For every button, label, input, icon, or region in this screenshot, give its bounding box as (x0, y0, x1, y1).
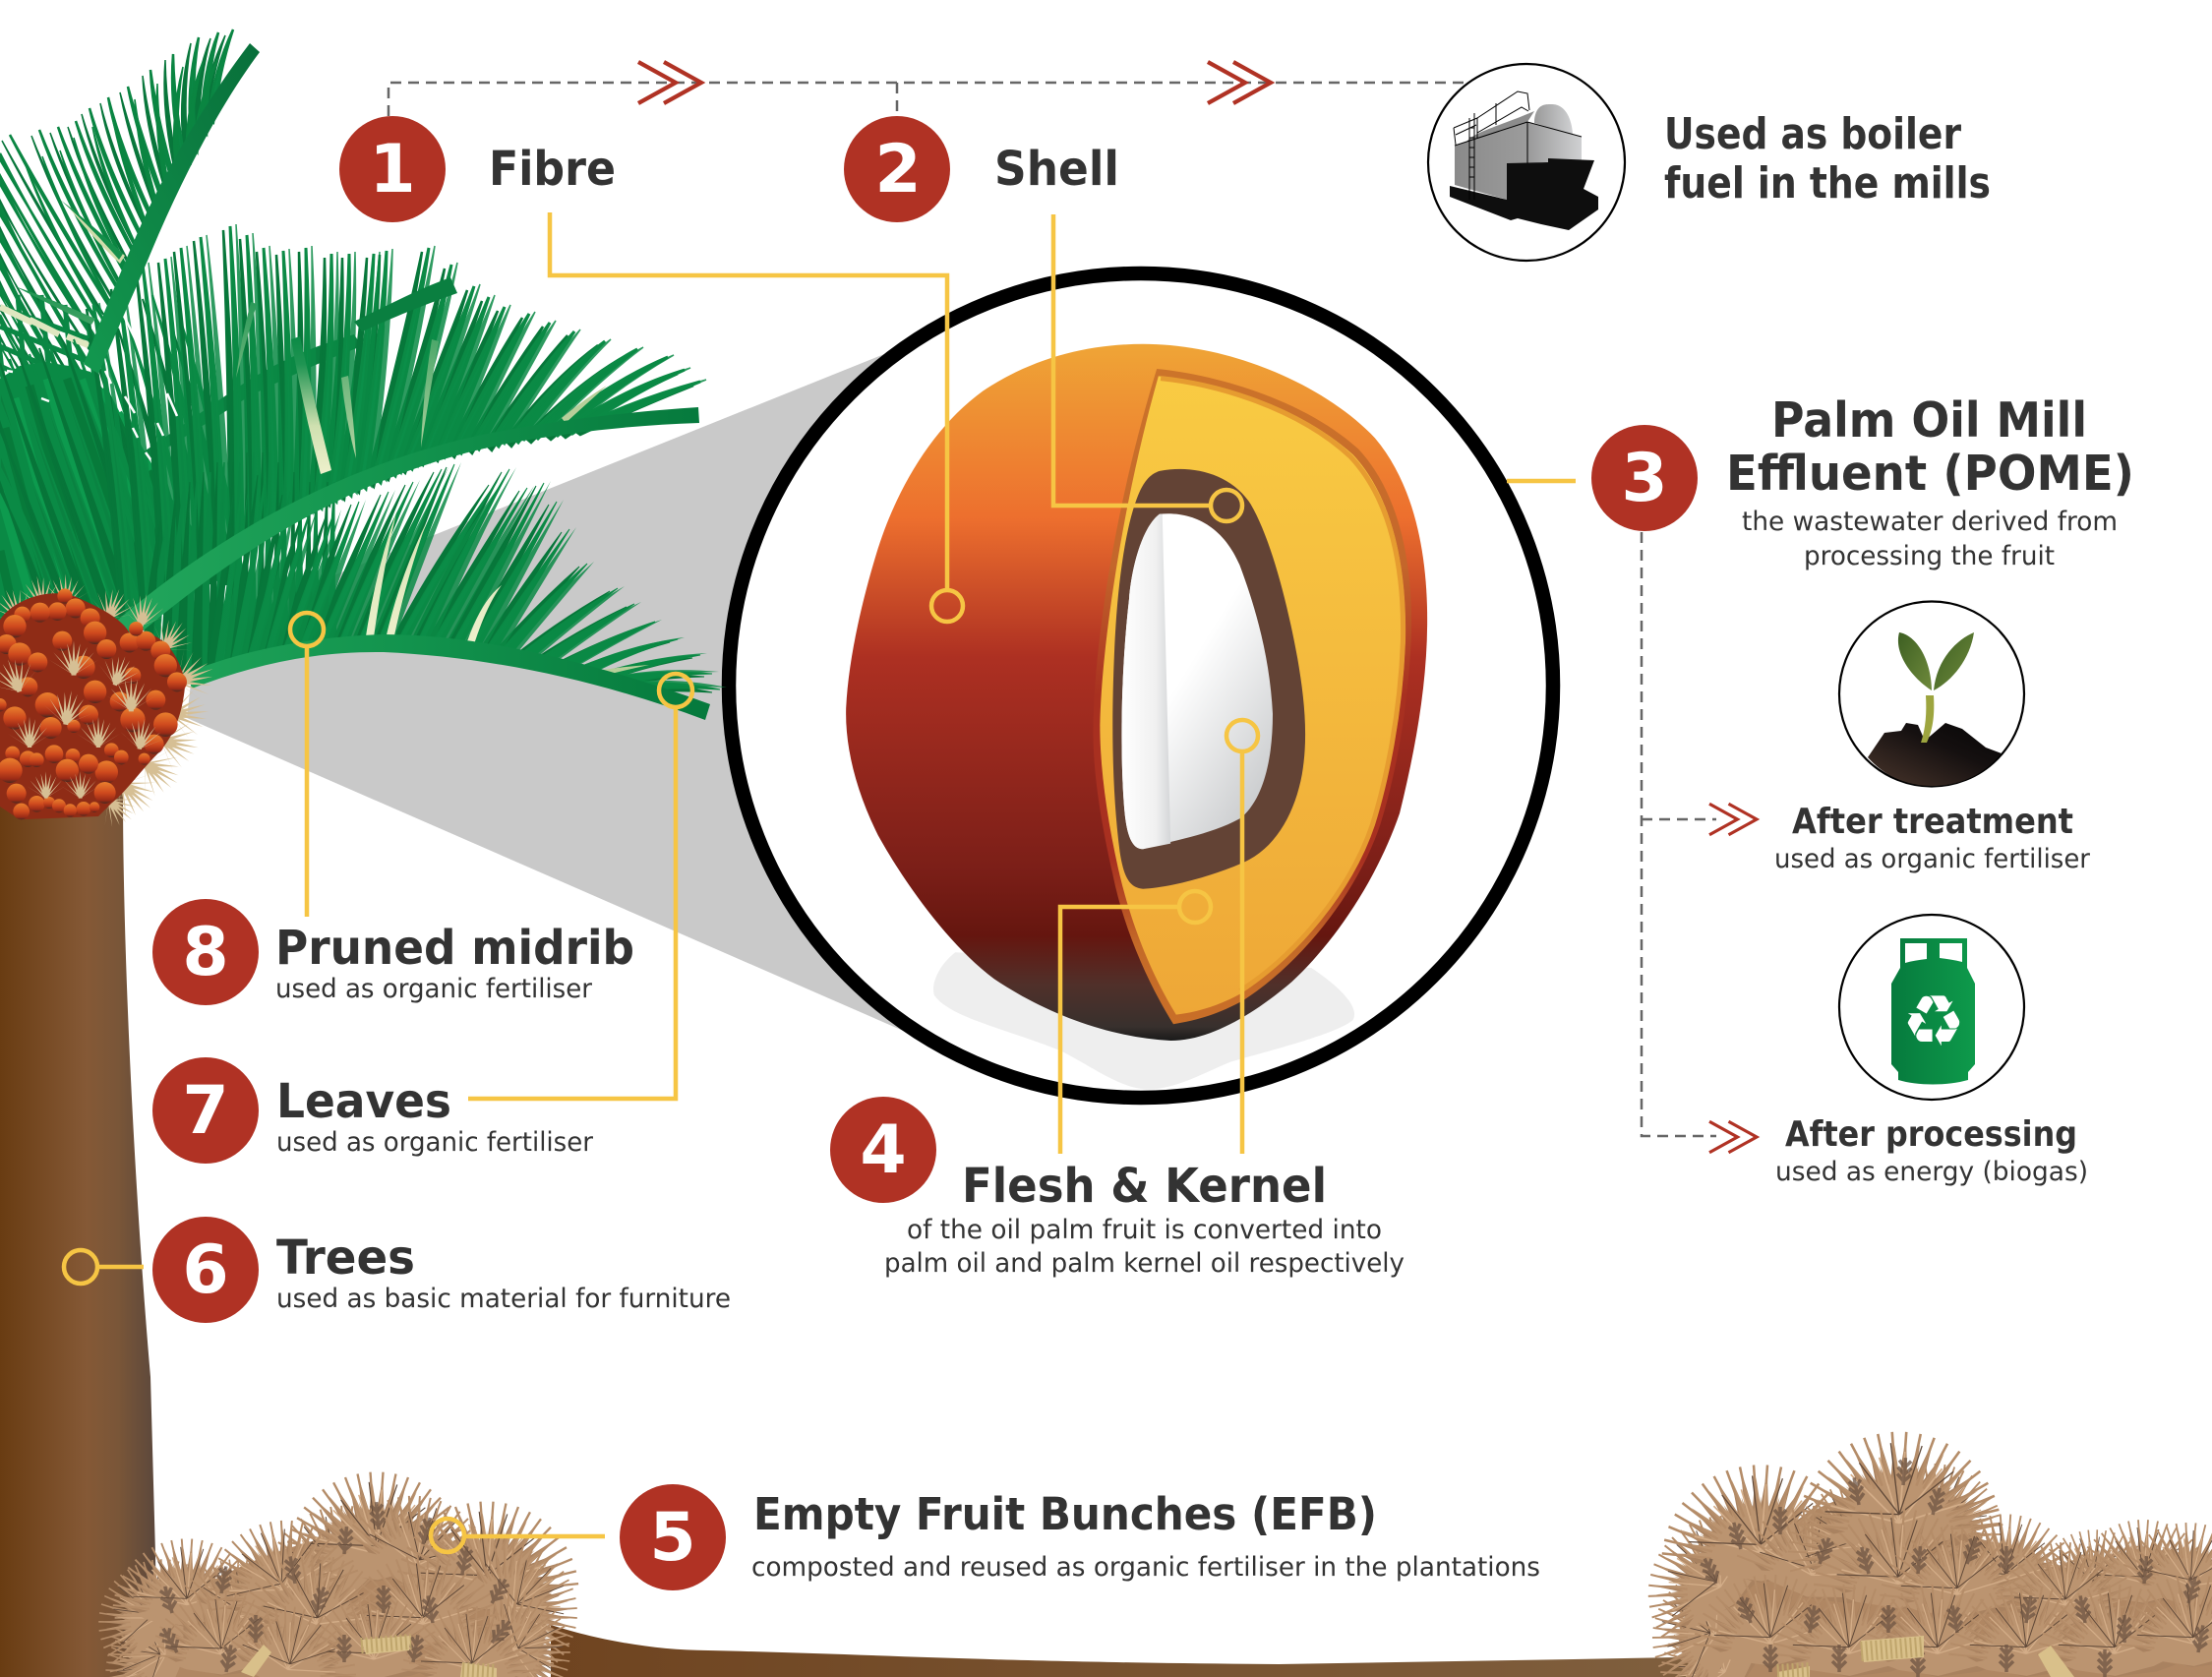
POME description (1742, 507, 2118, 571)
trees description: used as basic material for furniture (276, 1284, 731, 1314)
leaves description: used as organic fertiliser (276, 1127, 593, 1158)
POME heading (1726, 392, 2134, 502)
spikes over fruits (0, 641, 166, 799)
arrow: fibre to shell (638, 62, 701, 103)
label: after processing: used as energy (biogas) (1775, 1157, 2088, 1187)
flesh and kernel description (884, 1215, 1405, 1279)
item 3: POME (1591, 392, 2134, 571)
rib: frond A (84, 43, 260, 374)
item 1: fibre (339, 116, 616, 222)
kernel pointer (1226, 720, 1258, 1154)
icon: boiler (1428, 64, 1625, 261)
badge 7: 7 (182, 1072, 229, 1150)
badge 4: 4 (860, 1111, 907, 1189)
item 4: flesh and kernel (830, 1097, 1405, 1279)
badge 2: 2 (874, 131, 922, 209)
cut face rim (1093, 369, 1411, 1024)
badge 1 (339, 116, 446, 222)
arrow: after treatment (1709, 804, 1757, 835)
panel: fruit cross-section magnifier (729, 273, 1553, 1098)
badge 7 (152, 1057, 259, 1164)
shell pointer (1053, 214, 1242, 521)
flesh right band (1161, 379, 1404, 991)
label: after processing (1775, 1114, 2088, 1187)
badge 6 (152, 1217, 259, 1323)
EFB pointer (431, 1519, 605, 1552)
stalk hatching (1777, 1647, 1924, 1674)
bunch body (0, 593, 185, 819)
trees pointer (64, 1250, 144, 1284)
foliage slits (7, 308, 177, 459)
label: after treatment: After treatment (1792, 802, 2073, 842)
dashed connector: POME branches (1642, 532, 1716, 1136)
label: after treatment: used as organic fertiliser (1774, 844, 2090, 874)
badge 8: 8 (182, 914, 229, 991)
item 7: leaves (152, 1057, 593, 1164)
solid foliage mass (0, 362, 216, 639)
pale leaflet long (66, 204, 125, 264)
icon: biogas cylinder: ♻ (1902, 980, 1965, 1062)
badge 4 (830, 1097, 936, 1203)
pale leaflets (15, 200, 502, 644)
fruit ground shadow (933, 952, 1354, 1089)
label: boiler fuel: fuel in the mills (1664, 158, 1991, 209)
flesh and kernel description: palm oil and palm kernel oil respectively (884, 1248, 1405, 1279)
badge 3 (1591, 425, 1698, 531)
right empty fruit bunches pile (1616, 1430, 2212, 1677)
item 6: trees (152, 1217, 731, 1323)
magnifier white disc (729, 273, 1553, 1098)
leaves heading: Leaves (276, 1074, 451, 1129)
label: boiler fuel (1664, 109, 1991, 209)
pale leaflets upper (0, 307, 89, 345)
arrow: after processing (1709, 1121, 1757, 1153)
rib: frond D (187, 634, 710, 720)
item 2: shell (844, 116, 1119, 222)
icon: biogas cylinder (1839, 915, 2024, 1100)
magnifier black ring (729, 273, 1553, 1098)
POME heading: Effluent (POME) (1726, 446, 2134, 502)
dark spikelet marks (1699, 1457, 2210, 1677)
dark spikelet marks (157, 1501, 514, 1673)
fruit bunch (0, 572, 222, 837)
item 5: empty fruit bunches (620, 1484, 1540, 1590)
bunch stalks (241, 1636, 497, 1677)
pruned midrib description: used as organic fertiliser (275, 974, 592, 1004)
shell (1112, 469, 1305, 889)
midrib pointer (290, 613, 324, 917)
fibre pointer (550, 212, 963, 622)
kernel (1121, 513, 1273, 849)
badge 1: 1 (369, 131, 416, 209)
grey magnification cone (187, 352, 1141, 1037)
POME pointer (1507, 479, 1576, 483)
badge 5 (620, 1484, 726, 1590)
badge 3: 3 (1621, 440, 1668, 517)
bunch fruits (0, 588, 187, 819)
badge 8 (152, 899, 259, 1005)
EFB description: composted and reused as organic fertiliser in the plantations (751, 1552, 1540, 1583)
label: after processing: After processing (1785, 1114, 2077, 1155)
yellow callout lines (64, 212, 1576, 1552)
rib: frond B base (143, 334, 362, 460)
pale leaflet tips (562, 386, 649, 677)
flesh and kernel description: of the oil palm fruit is converted into (907, 1215, 1382, 1245)
arrow: shell to boiler (1208, 62, 1271, 103)
palm tree (0, 30, 727, 1677)
label: boiler fuel: Used as boiler (1664, 109, 1961, 159)
flesh (1100, 376, 1405, 1015)
POME description: processing the fruit (1804, 541, 2055, 571)
label fibre: Fibre (489, 142, 616, 197)
dashed connector: fibre and shell to boiler (389, 83, 1466, 116)
icon: sprout in soil (1839, 602, 2024, 787)
palm fronds (0, 30, 727, 720)
POME heading: Palm Oil Mill (1771, 392, 2087, 449)
left empty fruit bunches pile (72, 1469, 607, 1677)
stalk hatching (361, 1642, 497, 1672)
label: after treatment (1774, 802, 2090, 874)
bunch edge spikes (0, 572, 222, 837)
rib: frond B tip (354, 277, 457, 331)
label shell: Shell (994, 142, 1119, 197)
POME description: the wastewater derived from (1742, 507, 2118, 537)
flesh pointer (1060, 891, 1211, 1154)
fruit illustration (846, 344, 1427, 1089)
pale wide leaflet (291, 336, 331, 474)
fruit outer skin (846, 344, 1427, 1041)
trees heading: Trees (276, 1230, 415, 1286)
leaves pointer (468, 674, 692, 1099)
item 8: pruned midrib (152, 899, 634, 1005)
badge 5: 5 (649, 1499, 696, 1577)
rib: frond C (118, 407, 699, 639)
ground (551, 1625, 1731, 1677)
pruned midrib heading: Pruned midrib (275, 921, 634, 976)
flesh and kernel heading: Flesh & Kernel (962, 1159, 1327, 1214)
mass leaf stripes (0, 379, 221, 639)
badge 2 (844, 116, 950, 222)
crossing leaflets (0, 295, 102, 452)
trunk (0, 792, 157, 1677)
badge 6: 6 (182, 1231, 229, 1309)
bunch stalks (1777, 1636, 2074, 1677)
EFB heading: Empty Fruit Bunches (EFB) (753, 1488, 1377, 1540)
kernel left half (1121, 514, 1170, 849)
